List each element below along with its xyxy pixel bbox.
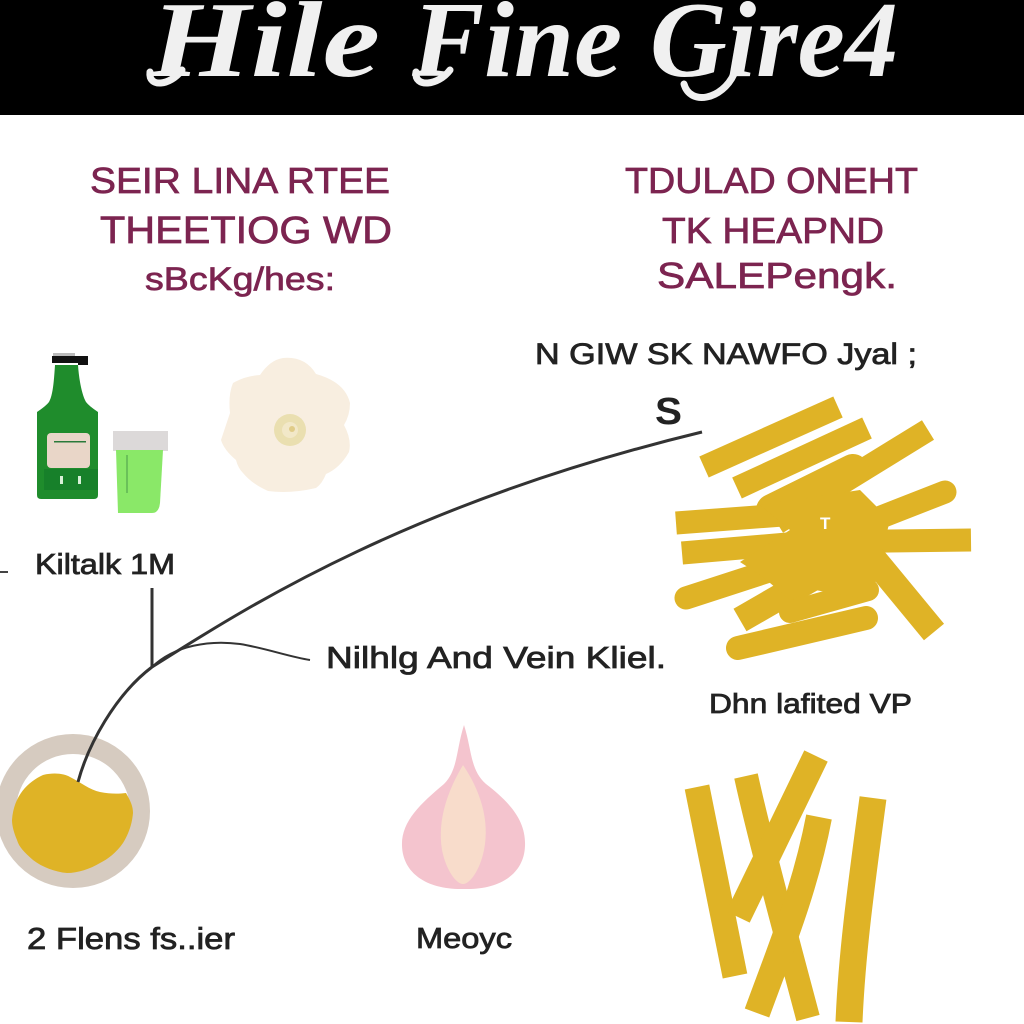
- connector lines: [78, 432, 702, 782]
- heading: right column: TK HEAPND: [662, 210, 884, 251]
- heading: left column: SEIR LINA RTEE: [90, 160, 390, 201]
- icon: yellow sticks: [697, 756, 873, 1022]
- label: middle: Nilhlg And Vein Kliel.: [326, 640, 666, 675]
- heading: left column: [90, 160, 392, 297]
- label: top right: N GIW SK NAWFO Jyal ;: [535, 338, 917, 371]
- label: bottle: Kiltalk 1M: [35, 549, 175, 581]
- icon: green glass: [113, 431, 168, 513]
- title banner: [0, 0, 1024, 115]
- label: garlic: Meoyc: [416, 923, 512, 955]
- icon: garlic: [402, 725, 525, 889]
- heading: right column: [625, 160, 918, 296]
- small tick mark: [0, 571, 8, 573]
- heading: left column: THEETIOG WD: [100, 210, 392, 252]
- heading: left column: sBcKg/hes:: [145, 261, 335, 297]
- icon: yellow fries pile: [676, 407, 971, 648]
- label: bowl: 2 Flens fs..ier: [27, 921, 235, 956]
- label: small s: S: [655, 391, 682, 433]
- heading: right column: TDULAD ONEHT: [625, 160, 918, 201]
- icon: green bottle: [37, 353, 98, 499]
- label: fries: Dhn lafited VP: [709, 688, 912, 719]
- fries centre letter: T: [820, 514, 831, 533]
- icon: bowl of yellow sauce: [6, 744, 140, 878]
- heading: right column: SALEPengk.: [657, 255, 897, 296]
- icon: cream flower: [221, 358, 350, 492]
